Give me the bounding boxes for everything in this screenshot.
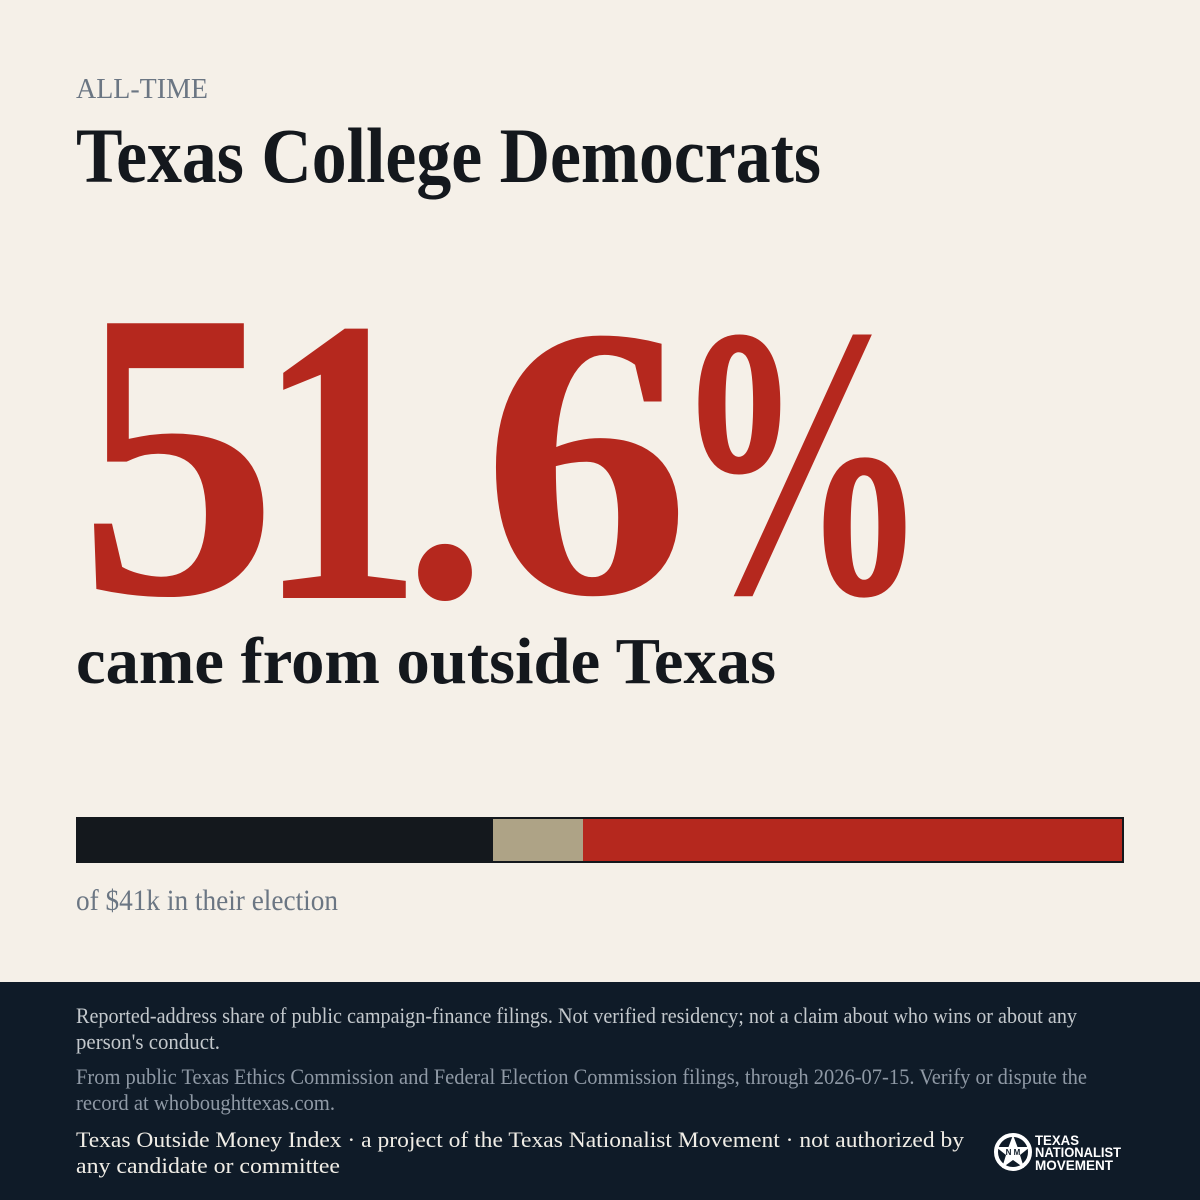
- attribution text: Texas Outside Money Index · a project of the Texas Nationalist Movement · not authorized by: [76, 1127, 964, 1152]
- logo: Texas Nationalist Movement: TEXAS: [1035, 1133, 1079, 1148]
- attribution text: any candidate or committee: [76, 1153, 340, 1178]
- big percentage: .: [404, 283, 487, 673]
- big percentage: [78, 226, 930, 687]
- source text: record at whoboughttexas.com.: [76, 1090, 335, 1115]
- logo: Texas Nationalist Movement: NATIONALIST: [1035, 1145, 1122, 1160]
- source text: From public Texas Ethics Commission and Federal Election Commission filings, through 2026-07-15. Verify or dispute the: [76, 1064, 1087, 1089]
- title: Texas College Democrats: [76, 112, 821, 199]
- attribution text: [76, 1127, 964, 1178]
- big percentage: 5: [78, 226, 278, 682]
- big percentage: %: [672, 248, 930, 677]
- source text: [76, 1064, 1087, 1115]
- logo: Texas Nationalist Movement: MOVEMENT: [1035, 1158, 1114, 1173]
- disclaimer text: [76, 1003, 1077, 1054]
- logo: Texas Nationalist Movement: N M: [1006, 1148, 1021, 1157]
- stacked bar: [76, 817, 1124, 863]
- logo: Texas Nationalist Movement: [996, 1133, 1122, 1173]
- subheading: came from outside Texas: [76, 625, 776, 698]
- footer panel: [0, 982, 1200, 1200]
- big percentage: 6: [482, 248, 690, 677]
- disclaimer text: person's conduct.: [76, 1029, 220, 1054]
- disclaimer text: Reported-address share of public campaign-finance filings. Not verified residency; not a claim about who wins or about any: [76, 1003, 1077, 1028]
- eyebrow label: ALL-TIME: [76, 74, 208, 105]
- big percentage: 1: [256, 234, 423, 687]
- bar caption: of $41k in their election: [76, 884, 338, 917]
